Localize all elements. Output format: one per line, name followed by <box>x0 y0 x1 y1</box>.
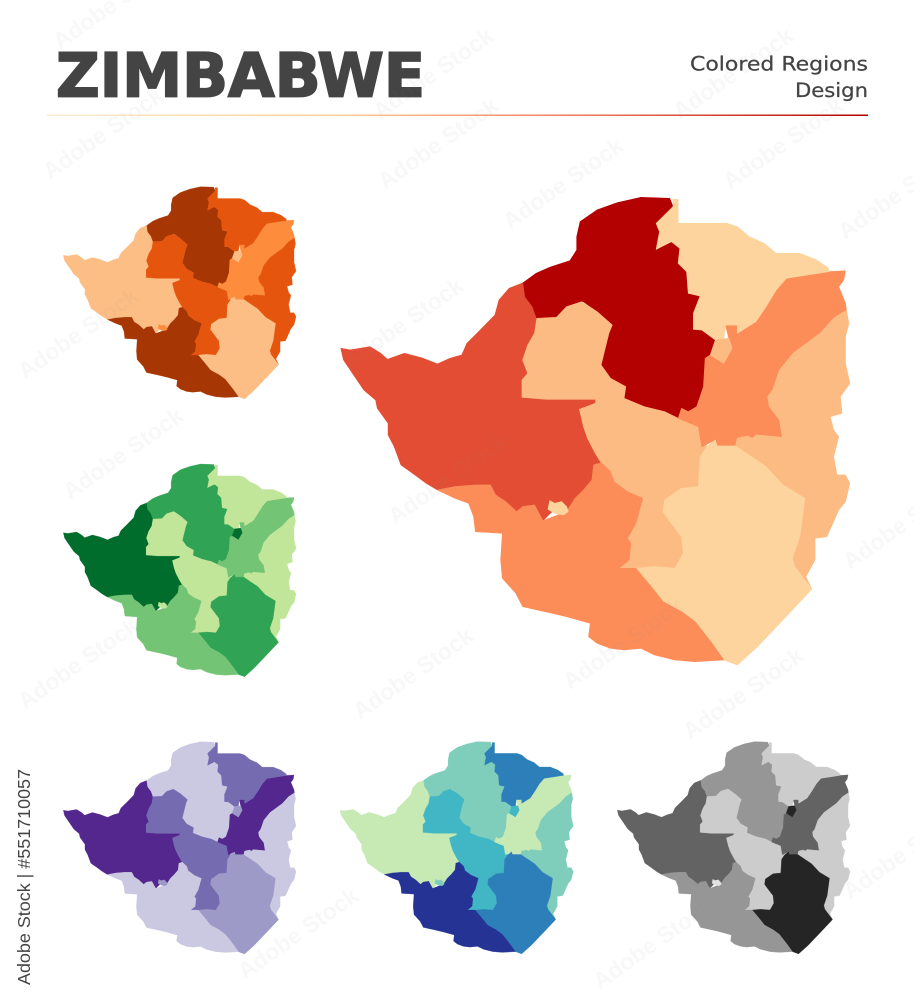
watermark: Adobe Stock <box>373 92 503 194</box>
map: green <box>63 464 296 677</box>
region: Masvingo <box>475 852 556 954</box>
map: large red-orange <box>341 197 850 665</box>
region: Mashonaland East <box>218 220 294 300</box>
watermark: Adobe Stock <box>58 402 188 504</box>
region: Masvingo <box>198 574 279 677</box>
region: Midlands <box>146 789 231 910</box>
watermark: Adobe Stock <box>338 272 468 374</box>
credit: vertical stock id: Adobe Stock | #551710057 <box>14 769 34 985</box>
region: Matabeleland North <box>617 780 736 888</box>
watermark: Adobe Stock <box>718 92 848 194</box>
subtitle <box>690 52 868 102</box>
watermark: Adobe Stock <box>348 622 478 724</box>
region: Manicaland <box>244 238 296 365</box>
region: Masvingo <box>198 297 279 399</box>
region: Midlands <box>522 302 707 568</box>
region: Bulawayo <box>158 324 167 331</box>
region: Manicaland <box>244 515 296 642</box>
watermark: Adobe Stock <box>558 592 688 694</box>
watermark: Adobe Stock <box>368 22 498 124</box>
region: Midlands <box>700 789 785 910</box>
subtitle: Colored Regions <box>690 52 868 76</box>
region: Harare <box>232 806 242 817</box>
region: Mashonaland East <box>772 775 848 855</box>
region: Matabeleland South <box>437 463 724 662</box>
region: Manicaland <box>244 793 296 920</box>
region: Masvingo <box>198 852 279 954</box>
region: Manicaland <box>736 310 850 589</box>
title: ZIMBABWE <box>56 40 425 112</box>
region: Masvingo <box>636 440 812 665</box>
watermark: Adobe Stock <box>498 132 628 234</box>
region: Harare <box>509 806 519 817</box>
region: Harare <box>232 251 242 262</box>
region: Mashonaland Central <box>761 743 840 806</box>
region: Mashonaland East <box>218 497 294 577</box>
region: Mashonaland West <box>523 197 715 418</box>
region: Manicaland <box>521 793 573 920</box>
watermark: Adobe Stock <box>678 642 808 744</box>
region: Mashonaland Central <box>207 465 286 529</box>
region: Harare <box>710 338 732 363</box>
region: Matabeleland South <box>108 307 238 397</box>
region: Matabeleland North <box>63 225 182 333</box>
watermark: Adobe Stock <box>13 612 143 714</box>
region: Midlands <box>146 234 231 355</box>
region: Mashonaland Central <box>207 188 286 251</box>
map: orange <box>63 187 296 399</box>
region: Bulawayo <box>158 602 167 609</box>
region: Mashonaland Central <box>484 743 563 806</box>
region: Bulawayo <box>158 879 167 886</box>
region: Mashonaland West <box>424 742 512 842</box>
map: purple <box>63 742 296 954</box>
region: Mashonaland West <box>147 742 235 842</box>
region: Midlands <box>146 511 231 633</box>
region: Matabeleland South <box>108 585 238 675</box>
region: Mashonaland West <box>147 187 235 287</box>
region: Matabeleland South <box>662 862 792 952</box>
region: Mashonaland Central <box>656 199 829 340</box>
region: Mashonaland East <box>678 271 846 447</box>
region: Matabeleland South <box>384 862 515 952</box>
region: Manicaland <box>798 793 850 920</box>
region: Masvingo <box>752 852 833 954</box>
region: Matabeleland South <box>108 862 238 952</box>
region: Harare <box>786 806 796 817</box>
region: Bulawayo <box>435 879 444 886</box>
region: Midlands <box>423 789 508 910</box>
region: Matabeleland North <box>340 780 459 888</box>
region: Mashonaland Central <box>207 743 286 806</box>
region: Matabeleland North <box>63 780 182 888</box>
region: Harare <box>232 528 242 540</box>
subtitle: Design <box>795 79 868 102</box>
region: Mashonaland West <box>147 464 235 565</box>
watermark: Adobe Stock <box>588 892 718 994</box>
watermark: Adobe Stock <box>38 82 168 184</box>
region: Bulawayo <box>712 879 721 886</box>
watermark: Adobe Stock <box>233 882 363 984</box>
map: blue-green <box>340 742 573 954</box>
region: Mashonaland East <box>218 775 294 855</box>
watermark: Adobe Stock <box>383 427 513 529</box>
region: Matabeleland North <box>63 503 182 611</box>
header rule <box>47 114 868 116</box>
watermark: Adobe Stock <box>13 282 143 384</box>
watermark: Adobe Stock <box>668 22 798 124</box>
region: Matabeleland North <box>341 283 601 521</box>
region: Mashonaland East <box>495 775 572 855</box>
region: Mashonaland West <box>701 742 789 842</box>
region: Bulawayo <box>548 501 568 515</box>
map: grayscale <box>617 742 850 954</box>
